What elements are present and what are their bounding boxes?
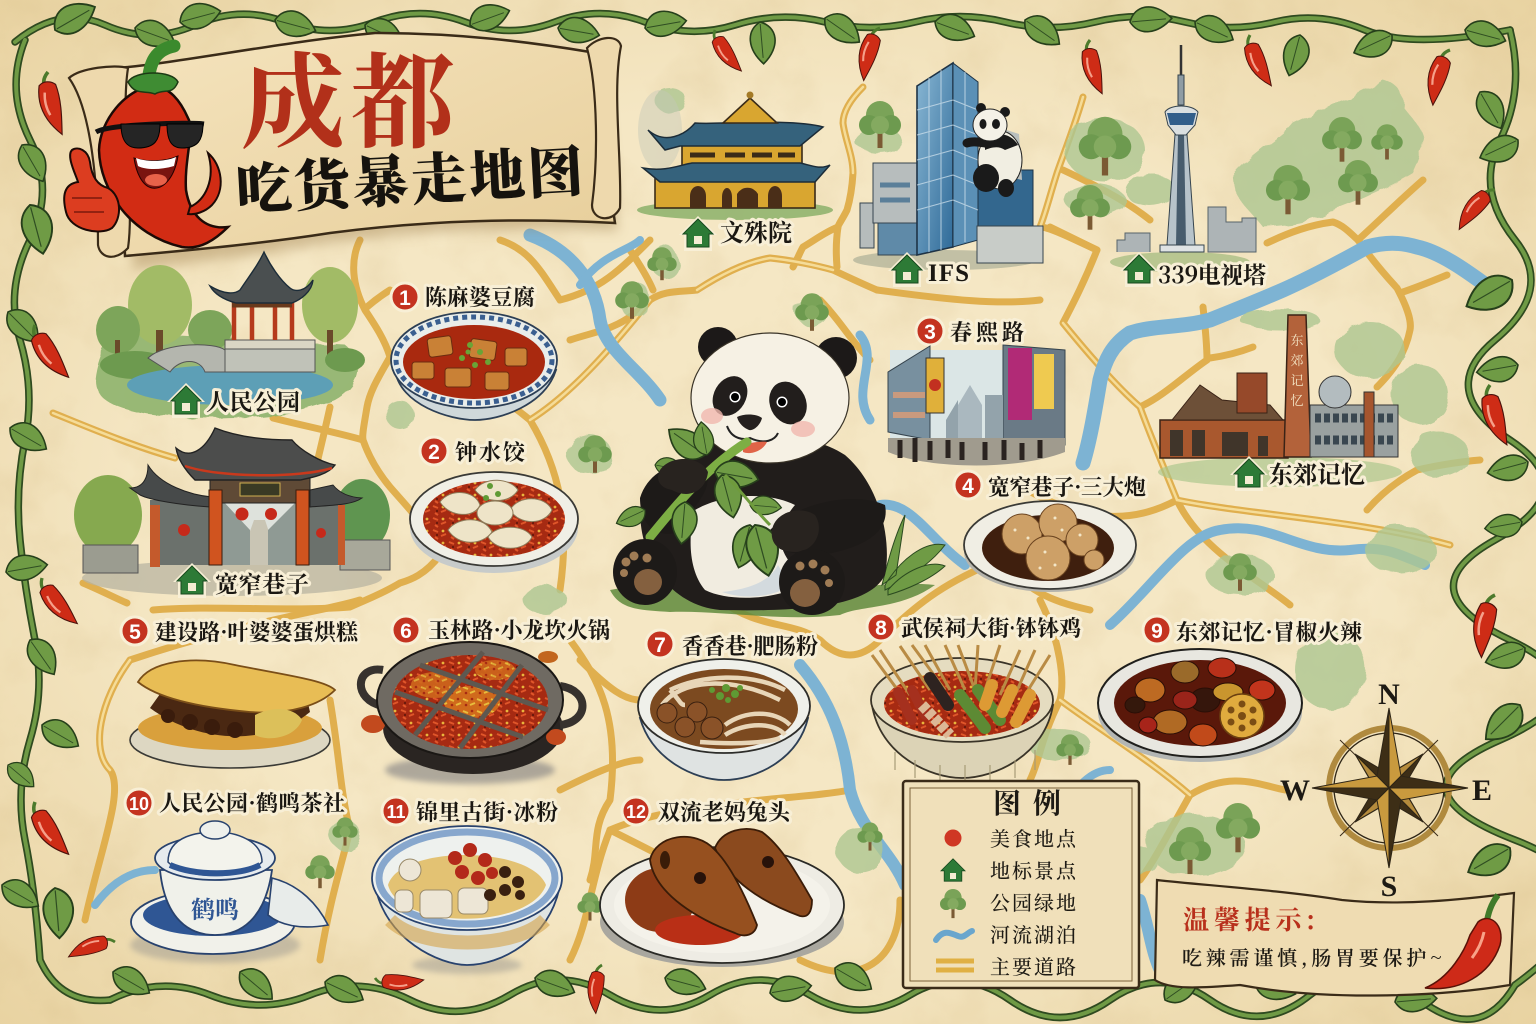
food spot 10: gaiwan tea	[125, 787, 345, 963]
landmark: IFS with climbing panda	[853, 63, 1043, 287]
legend: landmark: 地标景点	[990, 855, 1077, 884]
label: Wenshu	[679, 213, 792, 251]
label: IFS: IFS	[928, 260, 969, 287]
food spot 10: gaiwan tea: 人民公园·鹤鸣茶社	[159, 787, 345, 818]
compass letters: S	[1381, 870, 1397, 903]
label: Dongjiao: 东郊记忆	[1269, 455, 1365, 490]
landmark: Dongjiao Memory	[1158, 315, 1402, 491]
food spot 5: egg cake: 5	[129, 621, 141, 644]
legend title: 图例	[993, 782, 1061, 822]
food spot 7: noodles: 香香巷·肥肠粉	[682, 630, 818, 661]
bamboo and leaves	[650, 442, 747, 537]
tip heading: 温馨提示:	[1183, 900, 1315, 937]
landmark: People's Park	[95, 252, 365, 418]
food spot 2: Zhong dumplings: 2	[428, 441, 440, 464]
label: Kuanzhai	[173, 563, 309, 599]
tip body: 吃辣需谨慎,肠胃要保护~	[1182, 942, 1442, 971]
food spot 12: rabbit heads: 12	[626, 802, 646, 822]
title scroll banner	[69, 19, 621, 270]
panda body	[640, 436, 887, 610]
food spot 9: spicy plate: 9	[1151, 620, 1163, 643]
food spot 7: noodles	[638, 630, 818, 780]
compass letters	[1280, 678, 1492, 903]
food spot 3: Chunxi Road: 3	[924, 321, 936, 344]
food spot 3: Chunxi Road: 春熙路	[950, 316, 1024, 347]
label: 339 tower: 339电视塔	[1158, 257, 1266, 290]
label: IFS	[888, 252, 969, 287]
landmark: Dongjiao Memory: 忆	[1290, 390, 1304, 409]
panda right foot	[779, 549, 845, 615]
legend: park: 公园绿地	[990, 887, 1076, 916]
food spot 1: Mapo tofu: 1	[399, 287, 411, 310]
food spot 12: rabbit heads	[600, 796, 844, 967]
central panda with bamboo	[610, 327, 945, 617]
legend: food: 美食地点	[990, 823, 1077, 852]
food spot 12: rabbit heads: 双流老妈兔头	[658, 796, 792, 827]
compass rose	[1280, 678, 1492, 903]
food spot 6: hot pot: 玉林路·小龙坎火锅	[428, 614, 610, 645]
food spot 8: skewers in bowl: 武侯祠大街·钵钵鸡	[901, 612, 1081, 643]
legend: river: 河流湖泊	[990, 919, 1076, 948]
panda paw gripping bamboo	[658, 459, 708, 494]
food spot 4: San Da Pao: 宽窄巷子·三大炮	[988, 471, 1146, 502]
food spot 8: skewers in bowl: 8	[875, 617, 887, 640]
label: 339 tower	[1120, 252, 1266, 290]
subtitle: 吃货暴走地图	[233, 128, 585, 227]
label: Dongjiao	[1230, 455, 1365, 491]
food spot 11: ice jelly: 锦里古街·冰粉	[416, 796, 558, 827]
food spot 11: ice jelly	[372, 796, 562, 974]
label: Kuanzhai: 宽窄巷子	[215, 566, 309, 599]
compass letters: N	[1378, 678, 1400, 711]
label: People's Park	[167, 383, 300, 418]
food spot 9: spicy plate: 东郊记忆·冒椒火辣	[1176, 616, 1362, 647]
compass letters: W	[1280, 774, 1310, 807]
food spot 4: San Da Pao: 4	[962, 475, 974, 498]
green parks and trees	[305, 80, 1470, 921]
food spot 1: Mapo tofu: 陈麻婆豆腐	[425, 281, 535, 312]
food spot 5: egg cake: 建设路·叶婆婆蛋烘糕	[155, 616, 360, 647]
label: Wenshu: 文殊院	[720, 213, 792, 248]
icon: tip chili	[1425, 895, 1501, 989]
legend: park	[940, 887, 1076, 918]
food spot 11: ice jelly: 11	[386, 802, 406, 822]
rivers	[95, 235, 1483, 975]
food spot 2: Zhong dumplings	[410, 436, 578, 573]
legend: road	[936, 951, 1076, 980]
legend: road: 主要道路	[990, 951, 1076, 980]
panda right paw	[772, 510, 819, 552]
legend: food	[944, 823, 1077, 852]
panda arms	[640, 464, 708, 534]
panda head	[691, 333, 849, 463]
label: People's Park: 人民公园	[206, 384, 300, 417]
legend: landmark	[941, 855, 1077, 884]
food spot 10: gaiwan tea: 鹤鸣	[191, 890, 239, 925]
food spot 9: spicy plate	[1098, 616, 1362, 762]
landmark: Dongjiao Memory: 东	[1290, 330, 1304, 349]
title: Chengdu: 成都	[241, 19, 455, 169]
food spot 4: San Da Pao	[954, 471, 1146, 592]
landmark: Dongjiao Memory: 郊	[1290, 350, 1304, 369]
landmark: Wenshu Monastery	[637, 90, 833, 251]
landmark: Dongjiao Memory: 记	[1290, 370, 1304, 389]
landmark: Kuanzhai Alley gate	[74, 428, 390, 599]
food spot 2: Zhong dumplings: 钟水饺	[455, 436, 527, 467]
food spot 10: gaiwan tea: 10	[129, 794, 149, 814]
food spot 8: skewers in bowl	[867, 612, 1081, 780]
food spot 1: Mapo tofu	[391, 281, 557, 420]
warm tip panel	[1155, 880, 1514, 996]
landmark: 339 TV tower	[1110, 45, 1266, 290]
panda ears	[698, 327, 738, 367]
panda left foot	[613, 539, 677, 605]
food spot 7: noodles: 7	[654, 634, 666, 657]
chili mascot with sunglasses	[64, 46, 228, 248]
grass under panda	[610, 584, 935, 617]
food spot 6: hot pot	[361, 614, 610, 784]
panda belly	[691, 496, 795, 598]
food spot 5: egg cake	[121, 616, 360, 768]
food spot 6: hot pot: 6	[400, 620, 412, 643]
compass letters: E	[1472, 774, 1492, 807]
legend panel	[903, 781, 1139, 988]
food spot 3: Chunxi Road	[888, 316, 1065, 466]
legend: river	[936, 919, 1076, 948]
